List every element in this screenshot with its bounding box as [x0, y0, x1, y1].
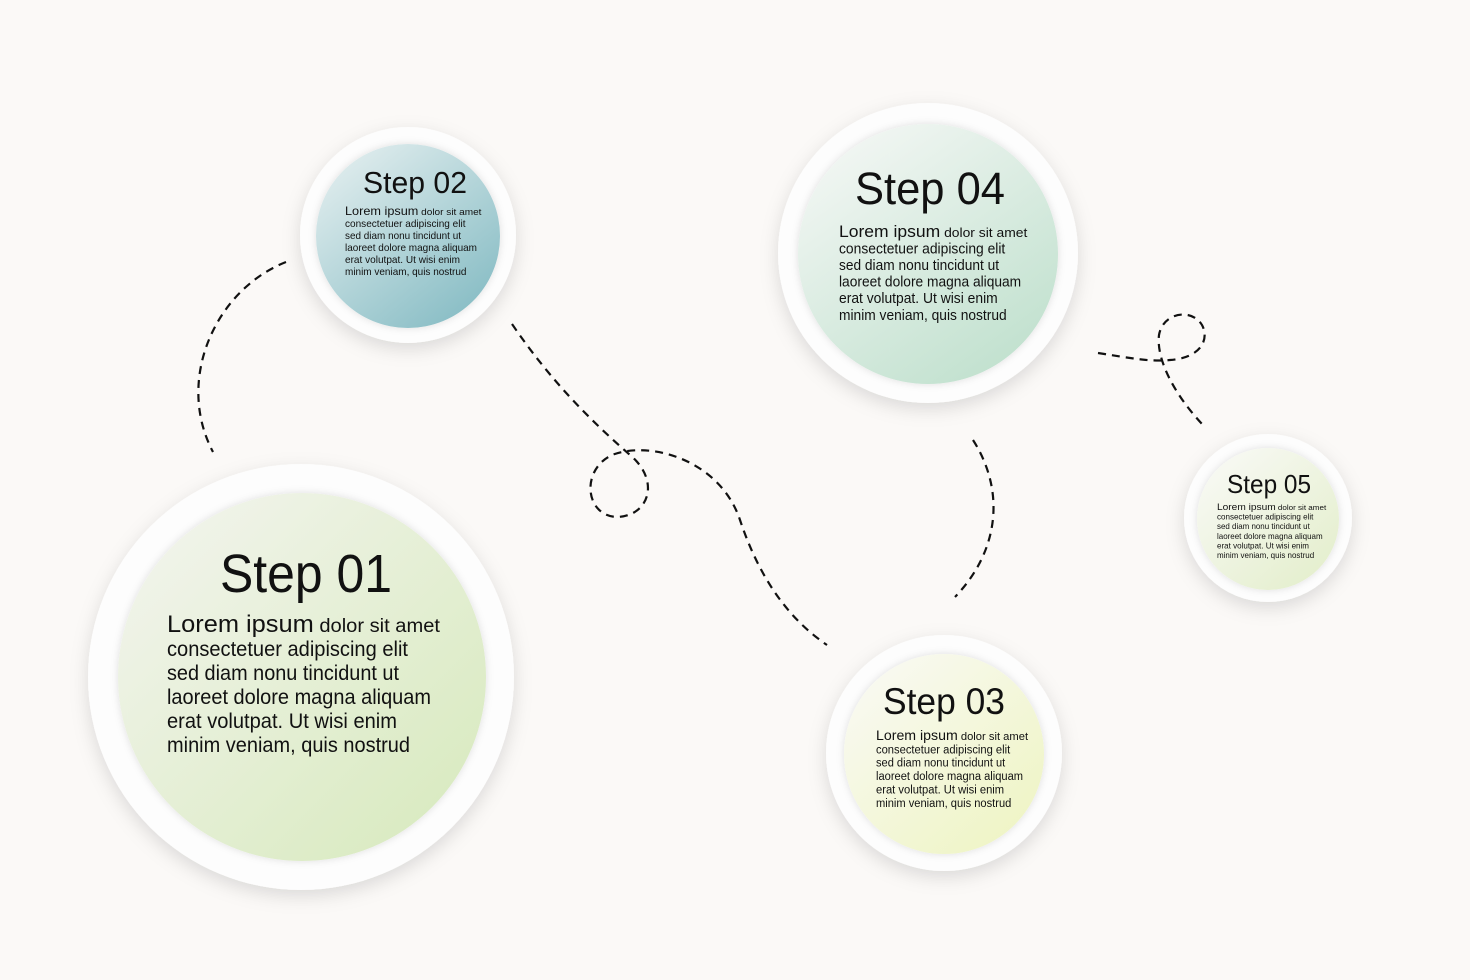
- title: Step 04: Step 04: [855, 163, 1005, 214]
- step 05: [1184, 434, 1352, 602]
- title: Step 02: Step 02: [363, 165, 467, 200]
- body text 04: [839, 222, 1028, 324]
- dashed connector 4-5 with loop: [1098, 315, 1205, 424]
- dashed connector 2-3 with loop: [512, 324, 827, 645]
- body text 03: [876, 728, 1028, 810]
- dashed connector 3-4: [955, 440, 994, 597]
- title: Step 01: Step 01: [220, 544, 392, 604]
- step 03: [826, 635, 1062, 871]
- step 04: [778, 103, 1078, 403]
- title: Step 05: Step 05: [1227, 469, 1311, 499]
- body text 05: [1217, 502, 1327, 560]
- step 02: [300, 127, 516, 343]
- title: Step 03: Step 03: [883, 681, 1005, 722]
- step 01: [88, 464, 514, 890]
- body text 01: [167, 611, 441, 757]
- body text 02: [345, 204, 482, 278]
- dashed connector 1-2: [198, 262, 286, 452]
